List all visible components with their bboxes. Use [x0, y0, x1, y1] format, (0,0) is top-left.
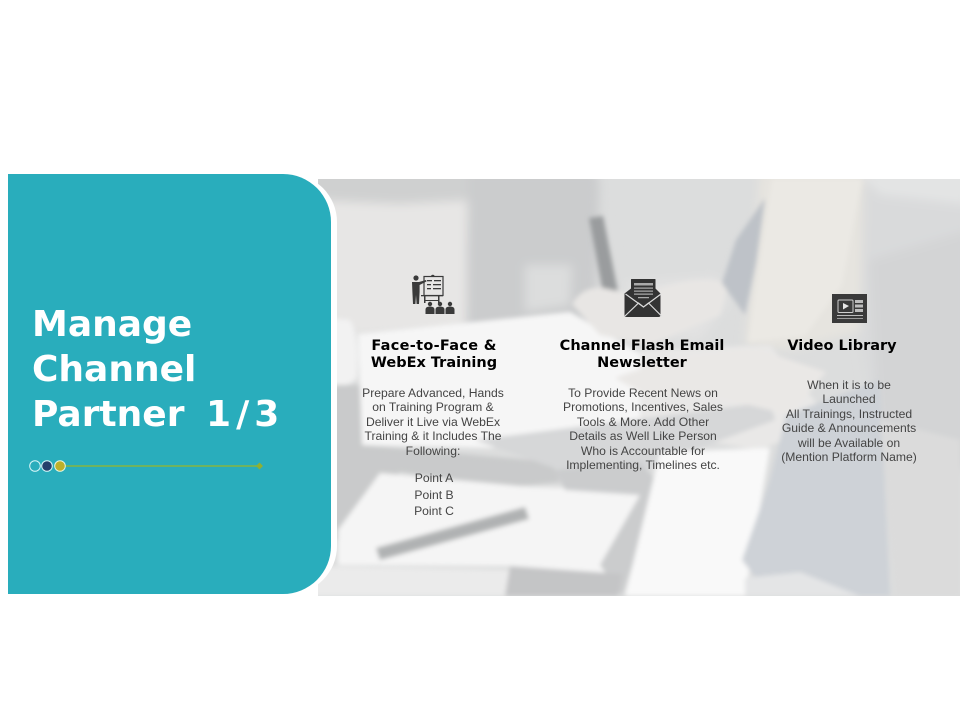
- stylus: [589, 216, 622, 320]
- dark band at lower left: [310, 385, 560, 540]
- text: newsletter description: [563, 386, 723, 472]
- text: points list: Point C: [414, 504, 454, 518]
- text: video library description: (Mention Platform Name): [781, 450, 917, 464]
- title: Manage: [32, 304, 192, 345]
- sleeve: [722, 198, 765, 315]
- text: points list: Point B: [414, 488, 454, 502]
- text: video library description: Launched: [822, 392, 876, 406]
- title: Partner 1/3: [32, 394, 284, 435]
- heading: Face-to-Face & WebEx Training: WebEx Training: [371, 355, 497, 371]
- hair: [748, 179, 862, 342]
- text: newsletter description: Who is Accountable for: [581, 444, 705, 458]
- text: training description: Following:: [406, 444, 460, 458]
- heading: Face-to-Face & WebEx Training: Face-to-Face &: [371, 338, 497, 354]
- text: training description: Prepare Advanced, Hands: [362, 386, 504, 400]
- heading: Video Library: Video Library: [787, 338, 897, 354]
- text: video library description: [781, 378, 917, 464]
- decorative dots and line: [29, 460, 263, 472]
- icon: envelope newsletter: [624, 279, 662, 317]
- text: newsletter description: Details as Well Like Person: [569, 429, 717, 443]
- pen: [376, 507, 529, 560]
- text: video library description: will be Available on: [798, 436, 900, 450]
- background photo: faded desk scene: [318, 179, 960, 596]
- right white page: [625, 448, 770, 596]
- reaching arm: [615, 350, 826, 415]
- text: points list: [414, 471, 454, 518]
- spiral notebook: [475, 402, 775, 470]
- heading: Channel Flash Email Newsletter: [560, 338, 724, 371]
- text: training description: [362, 386, 504, 458]
- text: video library description: When it is to be: [807, 378, 891, 392]
- lower notebook: [338, 473, 652, 575]
- title: Channel: [32, 349, 196, 390]
- title: [32, 304, 284, 435]
- bottom surfaces: [310, 566, 510, 596]
- hand: [572, 280, 728, 345]
- white paper and desk: [358, 312, 660, 448]
- icon: video library: [832, 294, 867, 323]
- icon: trainer with audience: [412, 274, 454, 314]
- text: newsletter description: Tools & More. Add Other: [577, 415, 709, 429]
- text: newsletter description: Implementing, Timelines etc.: [566, 458, 720, 472]
- heading: Channel Flash Email Newsletter: Newsletter: [597, 355, 687, 371]
- text: points list: Point A: [415, 471, 453, 485]
- dark shirt: [742, 380, 890, 596]
- heading: Face-to-Face & WebEx Training: [371, 338, 497, 371]
- text: training description: Training & it Includes The: [364, 429, 502, 443]
- text: newsletter description: To Provide Recent News on: [568, 386, 718, 400]
- text: video library description: All Trainings, Instructed: [786, 407, 912, 421]
- text: training description: Deliver it Live via WebEx: [366, 415, 500, 429]
- text: training description: on Training Program &: [372, 400, 494, 414]
- heading: Channel Flash Email Newsletter: Channel Flash Email: [560, 338, 724, 354]
- teal title panel: [8, 174, 331, 594]
- text: video library description: Guide & Announcements: [782, 421, 916, 435]
- dark strip: [555, 462, 660, 596]
- mug: [310, 316, 358, 387]
- text: newsletter description: Promotions, Incentives, Sales: [563, 400, 723, 414]
